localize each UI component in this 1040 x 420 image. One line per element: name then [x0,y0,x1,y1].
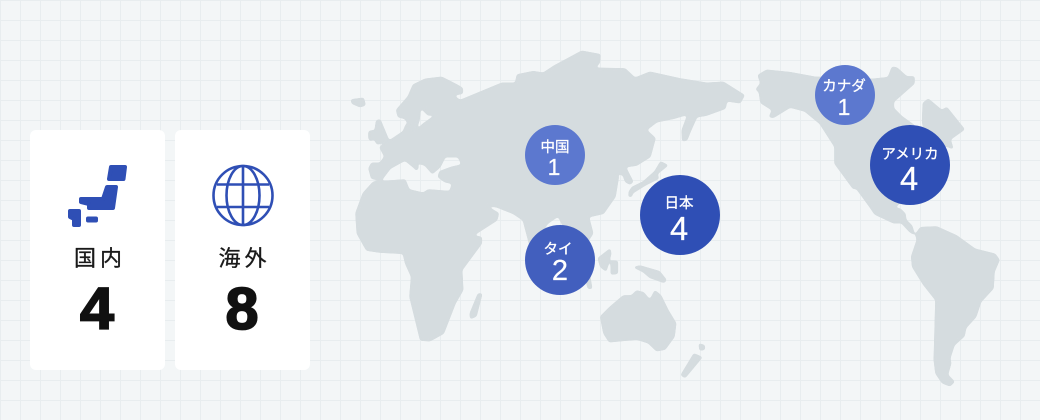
marker: USA: 4 [900,160,918,197]
label: overseas: 海外 [218,246,271,271]
marker: Japan [640,175,720,255]
marker: Thailand: 2 [552,255,568,287]
marker: USA [870,125,950,205]
icon: Japan map [70,167,125,225]
marker: Thailand [525,225,595,295]
marker: China [525,125,585,185]
marker: China: 中国 [540,139,570,156]
landmass: the Americas [681,67,999,386]
marker: China: 1 [548,154,560,180]
marker: Canada: 1 [838,94,850,120]
marker: Canada [815,65,875,125]
label: domestic: 国内 [74,246,126,271]
icon: globe [214,166,272,225]
marker: Japan: 日本 [664,195,694,212]
landmass: Eurasia, Africa and eastern islands [351,51,744,351]
marker: Thailand: タイ [544,241,572,258]
number: domestic: 4 [80,276,114,342]
marker: USA: アメリカ [881,147,939,163]
number: overseas: 8 [226,276,258,342]
panel: domestic [30,130,165,370]
world map [351,51,999,386]
marker: Japan: 4 [670,210,688,247]
panel: overseas [175,130,310,370]
marker: Canada: カナダ [822,78,866,95]
